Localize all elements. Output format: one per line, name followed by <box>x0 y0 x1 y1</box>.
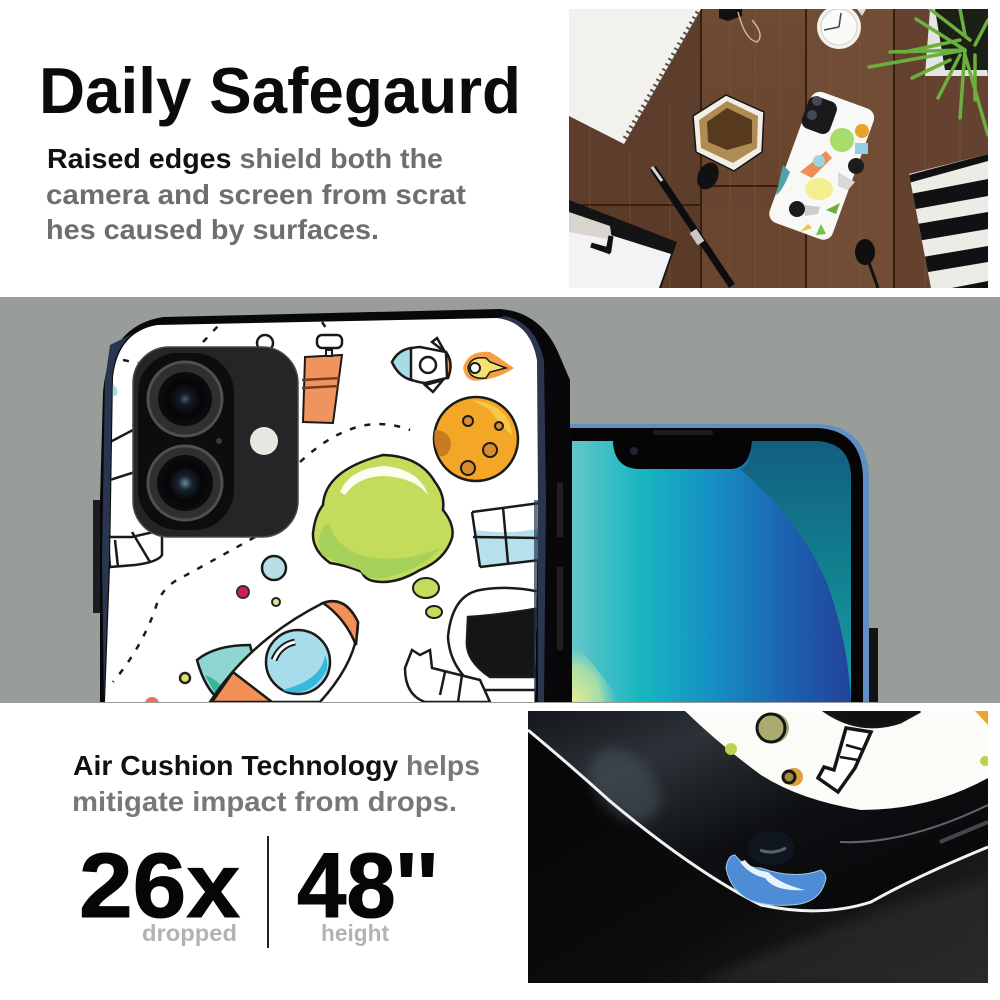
astronaut right <box>405 588 540 702</box>
orange planet <box>434 397 518 481</box>
stat: 26x dropped: 26x <box>79 835 240 937</box>
rim highlight blur <box>588 746 662 826</box>
coffee cup <box>697 162 719 190</box>
printed case surface <box>685 711 988 810</box>
text block: raised edges description <box>46 143 466 245</box>
blue box <box>472 503 540 567</box>
clipboard <box>569 200 677 288</box>
text block: air cushion description <box>72 750 480 817</box>
stat: 48 inches height: height <box>321 920 389 946</box>
flame <box>463 352 514 381</box>
flash <box>250 427 278 455</box>
dotted flight paths <box>113 322 410 682</box>
notch speaker <box>653 430 713 435</box>
gray band background <box>0 297 1000 703</box>
stat: 26x dropped: dropped <box>142 920 237 946</box>
case printed surface <box>105 318 538 702</box>
pen <box>653 168 732 286</box>
green bubble <box>313 455 453 618</box>
case print: circles <box>725 711 990 786</box>
microphone dot <box>216 438 222 444</box>
phone wallpaper <box>572 441 851 702</box>
navy rim <box>497 316 546 702</box>
right edge case shadow strip <box>534 500 538 702</box>
lens: lower <box>148 446 222 520</box>
small dots <box>145 556 286 711</box>
notch camera <box>630 447 638 455</box>
text block: raised edges description: Raised edges shield both the <box>47 143 443 174</box>
side button <box>869 628 878 702</box>
stat: 48 inches height: 48'' <box>297 835 438 937</box>
case side button <box>93 500 102 613</box>
air cushion bubble <box>726 855 826 905</box>
notebook <box>569 9 701 144</box>
text block: air cushion description: mitigate impact from drops. <box>72 786 457 817</box>
case outer frame <box>100 309 570 702</box>
air cushion dark dome <box>747 831 795 865</box>
photo: air cushion corner close-up <box>528 711 990 983</box>
lens: upper <box>148 362 222 436</box>
text block: raised edges description: hes caused by surfaces. <box>46 214 379 245</box>
blue frame <box>560 424 869 702</box>
photo: phone case on wooden desk <box>569 5 990 297</box>
small loop <box>257 335 273 351</box>
camera island <box>133 347 298 537</box>
text block: air cushion description: Air Cushion Technology helps <box>73 750 480 781</box>
binder clip <box>719 9 742 21</box>
small rocket <box>392 338 451 392</box>
orange capsule <box>302 335 342 423</box>
rim highlight line <box>528 730 988 911</box>
small phone case <box>766 89 877 243</box>
white lower section <box>0 703 1000 1000</box>
case right buttons <box>557 482 563 537</box>
case print: astronaut arm <box>818 711 920 792</box>
plant <box>925 9 988 76</box>
big rocket <box>197 601 358 702</box>
phone: screen side <box>560 424 878 702</box>
text block: raised edges description: camera and screen from scrat <box>46 179 466 210</box>
inner edge highlight <box>840 805 988 842</box>
phone case: back side <box>93 309 570 711</box>
striped notebook <box>909 154 988 288</box>
astronaut left <box>108 380 162 567</box>
clock <box>857 9 866 16</box>
stat divider <box>267 836 269 948</box>
spoon <box>855 239 875 265</box>
title: Daily Safegaurd <box>39 54 521 127</box>
case rim body <box>528 711 988 911</box>
floor reflection <box>722 888 980 982</box>
